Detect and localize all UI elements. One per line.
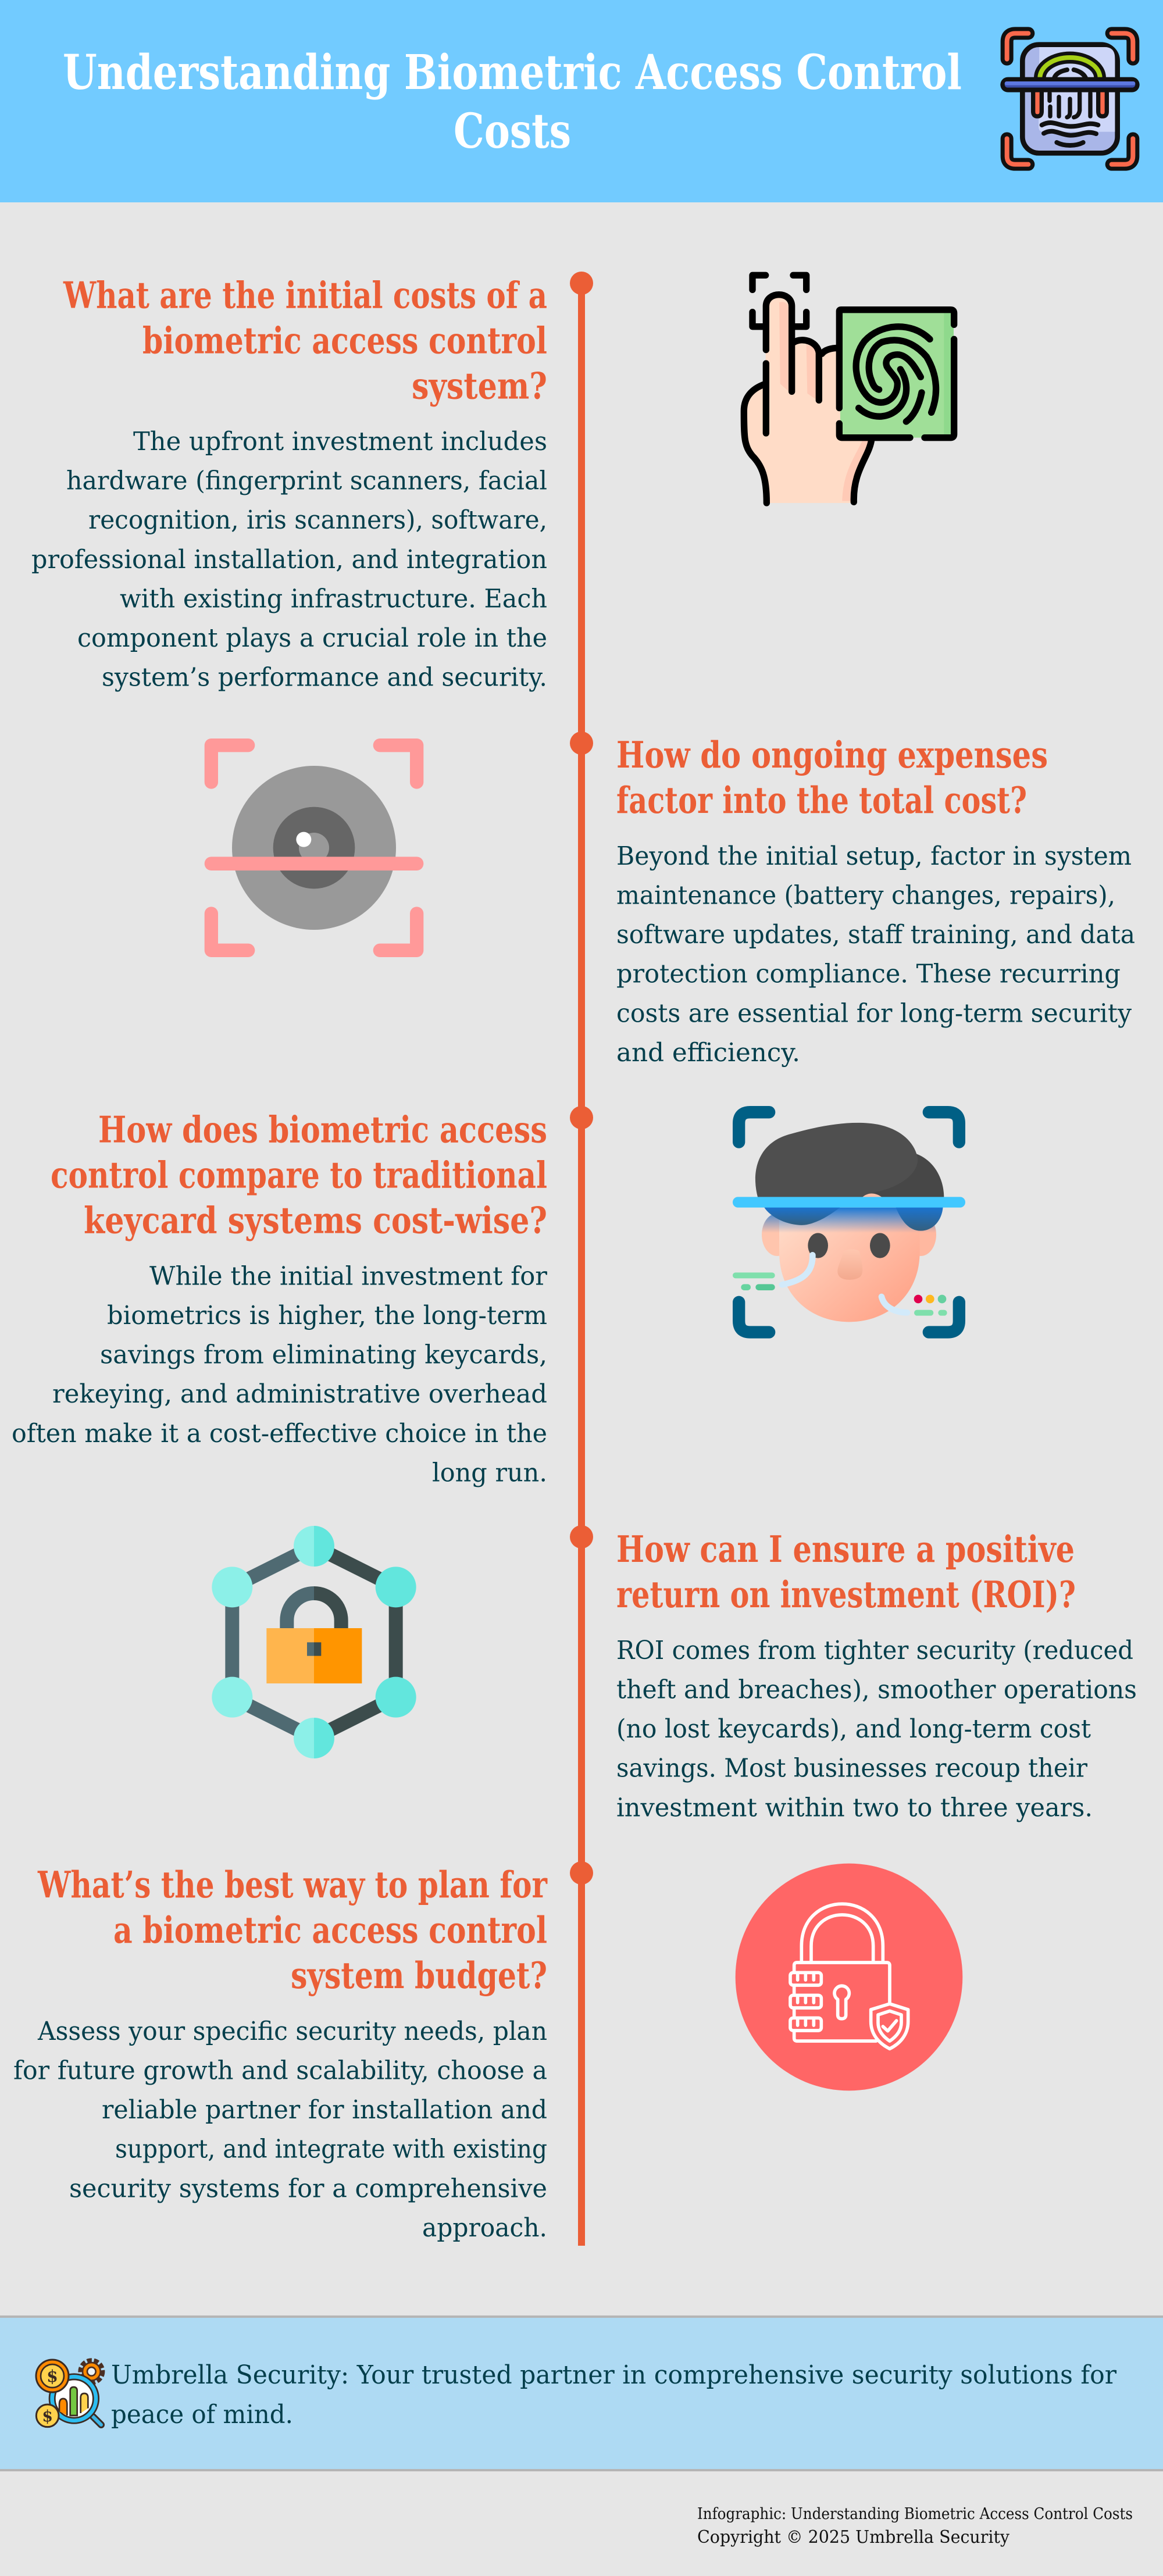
heading: compared with keycards: control compare to traditional (51, 1154, 547, 1197)
icon: iris scan (205, 745, 423, 950)
title (63, 45, 962, 159)
text: ongoing expenses: Beyond the initial setup, factor in system (616, 841, 1132, 871)
text: budget planning (13, 2017, 547, 2243)
text: ongoing expenses: maintenance (battery changes, repairs), (616, 880, 1115, 911)
callout text: peace of mind. (111, 2400, 293, 2429)
text: return on investment (616, 1636, 1137, 1822)
text: initial costs: professional installation, and integration (31, 545, 547, 575)
icon: face recognition (733, 1112, 965, 1332)
timeline dot 4 (570, 1525, 593, 1549)
timeline (570, 272, 593, 2246)
text: ongoing expenses: costs are essential for long-term security (616, 999, 1132, 1028)
text: ongoing expenses: and efficiency. (616, 1038, 800, 1068)
text: budget planning: approach. (422, 2213, 547, 2243)
footer credits (697, 2505, 1133, 2548)
text: initial costs (31, 427, 547, 693)
text: return on investment: ROI comes from tighter security (reduced (616, 1636, 1133, 1665)
panel: compared with keycards (12, 1108, 965, 1487)
text: initial costs: recognition, iris scanners), software, (88, 505, 547, 535)
heading: initial costs (63, 273, 547, 407)
heading: return on investment (616, 1528, 1076, 1616)
timeline dot 3 (570, 1106, 593, 1129)
heading: initial costs: What are the initial costs of a (63, 273, 547, 316)
text: compared with keycards: long run. (432, 1458, 547, 1487)
text: initial costs: hardware (fingerprint scanners, facial (66, 466, 547, 496)
text: compared with keycards: often make it a cost-effective choice in the (12, 1419, 547, 1448)
icon: coins and magnifier with chart (36, 2360, 102, 2427)
text: compared with keycards: rekeying, and administrative overhead (52, 1379, 547, 1409)
panel: ongoing expenses (205, 733, 1135, 1068)
text: return on investment: (no lost keycards), and long-term cost (616, 1714, 1091, 1744)
heading: initial costs: biometric access control (142, 319, 547, 362)
heading: compared with keycards (51, 1108, 547, 1242)
heading: budget planning: a biometric access control (113, 1908, 547, 1951)
icon: padlock with shield (736, 1864, 962, 2090)
heading: ongoing expenses: factor into the total cost? (616, 779, 1027, 822)
footer credits: Infographic: Understanding Biometric Access Control Costs (697, 2505, 1133, 2523)
text: return on investment: savings. Most businesses recoup their (616, 1754, 1088, 1783)
icon: coins and magnifier with chart: $ (47, 2367, 58, 2386)
text: return on investment: investment within two to three years. (616, 1793, 1093, 1822)
icon: finger on fingerprint pad (743, 275, 954, 503)
panel: initial costs (31, 273, 954, 693)
text: ongoing expenses: software updates, staff training, and data (616, 920, 1135, 950)
heading: initial costs: system? (412, 364, 547, 407)
heading: budget planning: system budget? (291, 1954, 547, 1997)
panel: return on investment (212, 1526, 1137, 1822)
callout band: Umbrella Security (0, 2315, 1163, 2471)
text: initial costs: with existing infrastructure. Each (120, 584, 547, 613)
text: compared with keycards: biometrics is higher, the long-term (107, 1301, 547, 1330)
timeline dot 5 (570, 1861, 593, 1885)
text: initial costs: component plays a crucial role in the (77, 623, 547, 653)
text: compared with keycards: While the initial investment for (149, 1262, 548, 1291)
title: Understanding Biometric Access Control (63, 45, 962, 101)
text: compared with keycards: savings from eliminating keycards, (100, 1340, 547, 1370)
text: budget planning: security systems for a comprehensive (69, 2174, 547, 2204)
timeline dot 1 (570, 272, 593, 295)
text: ongoing expenses (616, 841, 1135, 1068)
heading: compared with keycards: keycard systems cost-wise? (84, 1199, 547, 1242)
icon: coins and magnifier with chart: $ (42, 2407, 53, 2425)
text: budget planning: support, and integrate with existing (115, 2135, 547, 2164)
text: ongoing expenses: protection compliance. These recurring (616, 959, 1121, 989)
heading: budget planning (37, 1863, 548, 1997)
icon: fingerprint scanner (1000, 33, 1140, 165)
text: budget planning: Assess your specific security needs, plan (37, 2017, 547, 2046)
text: budget planning: for future growth and scalability, choose a (13, 2056, 547, 2085)
heading: budget planning: What’s the best way to plan for (37, 1863, 548, 1906)
text: initial costs: system’s performance and security. (102, 663, 547, 693)
heading: ongoing expenses: How do ongoing expenses (616, 733, 1048, 776)
heading: compared with keycards: How does biometric access (98, 1108, 547, 1151)
text: initial costs: The upfront investment includes (133, 427, 547, 456)
timeline dot 2 (570, 732, 593, 755)
heading: ongoing expenses (616, 733, 1048, 822)
text: budget planning: reliable partner for installation and (102, 2095, 547, 2125)
panel: budget planning (13, 1863, 962, 2243)
text: return on investment: theft and breaches), smoother operations (616, 1675, 1137, 1705)
icon: padlock in network hexagon (212, 1526, 416, 1758)
header banner (0, 0, 1163, 202)
text: compared with keycards (12, 1262, 548, 1487)
title: Costs (454, 104, 571, 159)
callout text: Umbrella Security: Your trusted partner in comprehensive security solutions for (111, 2360, 1117, 2390)
footer credits: Copyright © 2025 Umbrella Security (697, 2527, 1009, 2548)
callout text (111, 2360, 1117, 2429)
